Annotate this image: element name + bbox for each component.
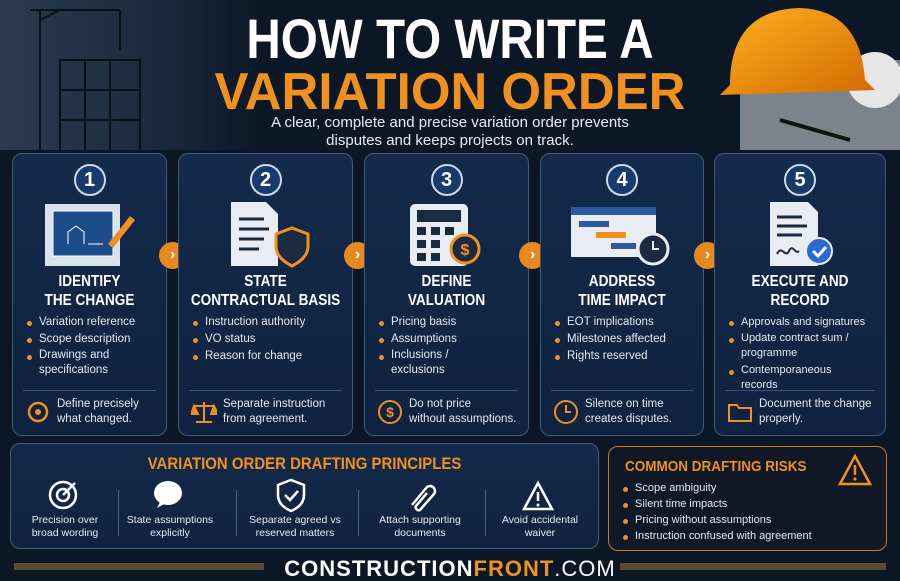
card 1: specifications bbox=[39, 364, 108, 376]
text: Separate agreed vs bbox=[249, 514, 341, 526]
icon: document with shield bbox=[231, 202, 310, 268]
panel: common drafting risks: Scope ambiguity bbox=[635, 482, 716, 494]
card 3: Pricing basis bbox=[391, 316, 456, 328]
text: explicitly bbox=[150, 527, 190, 539]
icon: calculator with coin bbox=[410, 204, 480, 266]
card 5: 5 bbox=[794, 169, 806, 191]
card 3: Assumptions bbox=[391, 333, 457, 345]
arrow bbox=[344, 242, 371, 269]
card 1: Variation reference bbox=[39, 316, 135, 328]
card 1: THE CHANGE bbox=[45, 292, 134, 309]
card 2: Separate instruction bbox=[223, 398, 325, 410]
card 2: from agreement. bbox=[223, 413, 307, 425]
title: VARIATION ORDER bbox=[215, 63, 685, 121]
card 3: 3 bbox=[441, 169, 452, 191]
card 5: records bbox=[741, 379, 778, 391]
arrow: › bbox=[530, 246, 535, 263]
card 4: TIME IMPACT bbox=[578, 292, 666, 309]
card 5: Approvals and signatures bbox=[741, 316, 865, 328]
icon: dollar coin: $ bbox=[386, 404, 394, 420]
icon: signed document with check bbox=[770, 202, 833, 266]
background photo: construction site bbox=[0, 0, 260, 150]
card 5: EXECUTE AND bbox=[752, 273, 848, 290]
card 5: RECORD bbox=[771, 292, 829, 309]
panel: common drafting risks: Silent time impacts bbox=[635, 498, 727, 510]
card 3: VALUATION bbox=[408, 292, 485, 309]
card 5: programme bbox=[741, 347, 797, 359]
card 5: Document the change bbox=[759, 398, 872, 410]
icon: calculator with coin: $ bbox=[461, 242, 470, 259]
card 2: STATE bbox=[244, 273, 287, 290]
arrow: › bbox=[355, 246, 360, 263]
text: State assumptions bbox=[127, 514, 213, 526]
card 1: Drawings and bbox=[39, 349, 109, 361]
card 4: Rights reserved bbox=[567, 350, 648, 362]
card 5: properly. bbox=[759, 413, 803, 425]
card 3: Inclusions / bbox=[391, 349, 449, 361]
card 4: ADDRESS bbox=[589, 273, 655, 290]
card 3 bbox=[364, 153, 529, 436]
card 3: DEFINE bbox=[422, 273, 471, 290]
card 4: creates disputes. bbox=[585, 413, 672, 425]
heading: VARIATION ORDER DRAFTING PRINCIPLES bbox=[148, 454, 461, 473]
icon: scales bbox=[191, 402, 217, 423]
card 1: Scope description bbox=[39, 333, 130, 345]
title bbox=[214, 7, 685, 121]
text: reserved matters bbox=[256, 527, 334, 539]
icon: gantt chart with clock bbox=[571, 207, 670, 266]
heading: COMMON DRAFTING RISKS bbox=[625, 458, 807, 475]
panel: common drafting risks: Pricing without assumptions bbox=[635, 514, 771, 526]
icon: target bbox=[28, 402, 48, 422]
card 2: CONTRACTUAL BASIS bbox=[191, 292, 340, 309]
background photo: hard hat and blueprints bbox=[720, 8, 900, 150]
card 1 bbox=[12, 153, 167, 436]
arrow: › bbox=[705, 246, 710, 263]
card 1: what changed. bbox=[57, 413, 132, 425]
card 4 bbox=[540, 153, 704, 436]
text: Avoid accidental bbox=[502, 514, 578, 526]
card 4: Silence on time bbox=[585, 398, 664, 410]
card 2: VO status bbox=[205, 333, 256, 345]
icon: warning bbox=[838, 454, 872, 486]
text: Precision over bbox=[32, 514, 98, 526]
text: waiver bbox=[525, 527, 555, 539]
panel: drafting principles bbox=[10, 443, 599, 549]
card 5: Contemporaneous bbox=[741, 364, 832, 376]
principle icons bbox=[48, 478, 554, 512]
card 2: Reason for change bbox=[205, 350, 302, 362]
arrow bbox=[694, 242, 721, 269]
footer brand: CONSTRUCTIONFRONT.COM bbox=[284, 556, 616, 581]
panel: common drafting risks: Instruction confused with agreement bbox=[635, 530, 812, 542]
card 5 bbox=[714, 153, 886, 436]
card 4: 4 bbox=[616, 169, 628, 191]
card 5: Update contract sum / bbox=[741, 332, 849, 344]
arrow: › bbox=[170, 246, 175, 263]
card 2: 2 bbox=[260, 169, 271, 191]
arrow bbox=[519, 242, 546, 269]
card 3: without assumptions. bbox=[409, 413, 516, 425]
text: Attach supporting bbox=[379, 514, 461, 526]
icon: folder bbox=[728, 404, 752, 422]
card 1: 1 bbox=[84, 169, 95, 191]
title: HOW TO WRITE A bbox=[246, 7, 654, 70]
card 2 bbox=[178, 153, 353, 436]
card 1: IDENTIFY bbox=[59, 273, 120, 290]
card 1: Define precisely bbox=[57, 398, 139, 410]
card 4: EOT implications bbox=[567, 316, 654, 328]
icon: dollar coin bbox=[378, 400, 402, 424]
subtitle: A clear, complete and precise variation order prevents disputes and keeps projects on track. bbox=[271, 114, 629, 149]
card 2: Instruction authority bbox=[205, 316, 305, 328]
text: broad wording bbox=[32, 527, 98, 539]
arrow bbox=[159, 242, 186, 269]
card 4: Milestones affected bbox=[567, 333, 666, 345]
icon: clock bbox=[554, 400, 578, 424]
panel: common drafting risks bbox=[608, 446, 887, 551]
card 3: exclusions bbox=[391, 364, 445, 376]
text: documents bbox=[394, 527, 446, 539]
card 3: Do not price bbox=[409, 398, 471, 410]
icon: blueprint with pencil bbox=[45, 204, 135, 266]
